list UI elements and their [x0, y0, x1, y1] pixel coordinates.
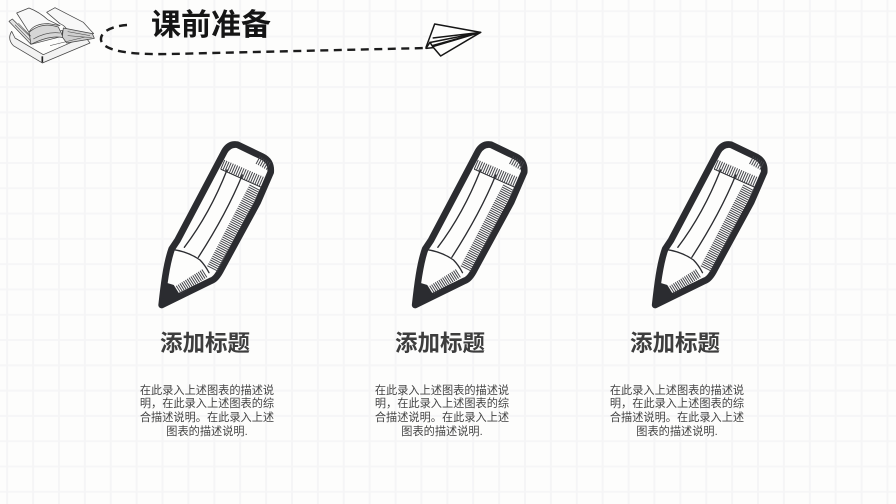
panel: column 2 [375, 330, 509, 438]
heading 1: 添加标题 [160, 330, 250, 356]
dashed flight path [101, 25, 426, 54]
description 3: 在此录入上述图表的描述说明，在此录入上述图表的综合描述说明。在此录入上述图表的描述说明. [610, 384, 744, 438]
title: 课前准备 [151, 9, 271, 42]
panel: column 3 [610, 330, 744, 438]
icon: pencil 2 [414, 144, 524, 307]
description 1: 在此录入上述图表的描述说明，在此录入上述图表的综合描述说明。在此录入上述图表的描述说明. [140, 384, 274, 438]
heading 2: 添加标题 [395, 330, 485, 356]
heading 3: 添加标题 [630, 330, 720, 356]
icon: books [9, 8, 94, 63]
icon: pencil 1 [160, 144, 271, 307]
icon: pencil 3 [654, 144, 764, 307]
description 2: 在此录入上述图表的描述说明，在此录入上述图表的综合描述说明。在此录入上述图表的描述说明. [375, 384, 509, 438]
icon: paper airplane [426, 24, 481, 56]
panel: column 1 [140, 330, 274, 438]
